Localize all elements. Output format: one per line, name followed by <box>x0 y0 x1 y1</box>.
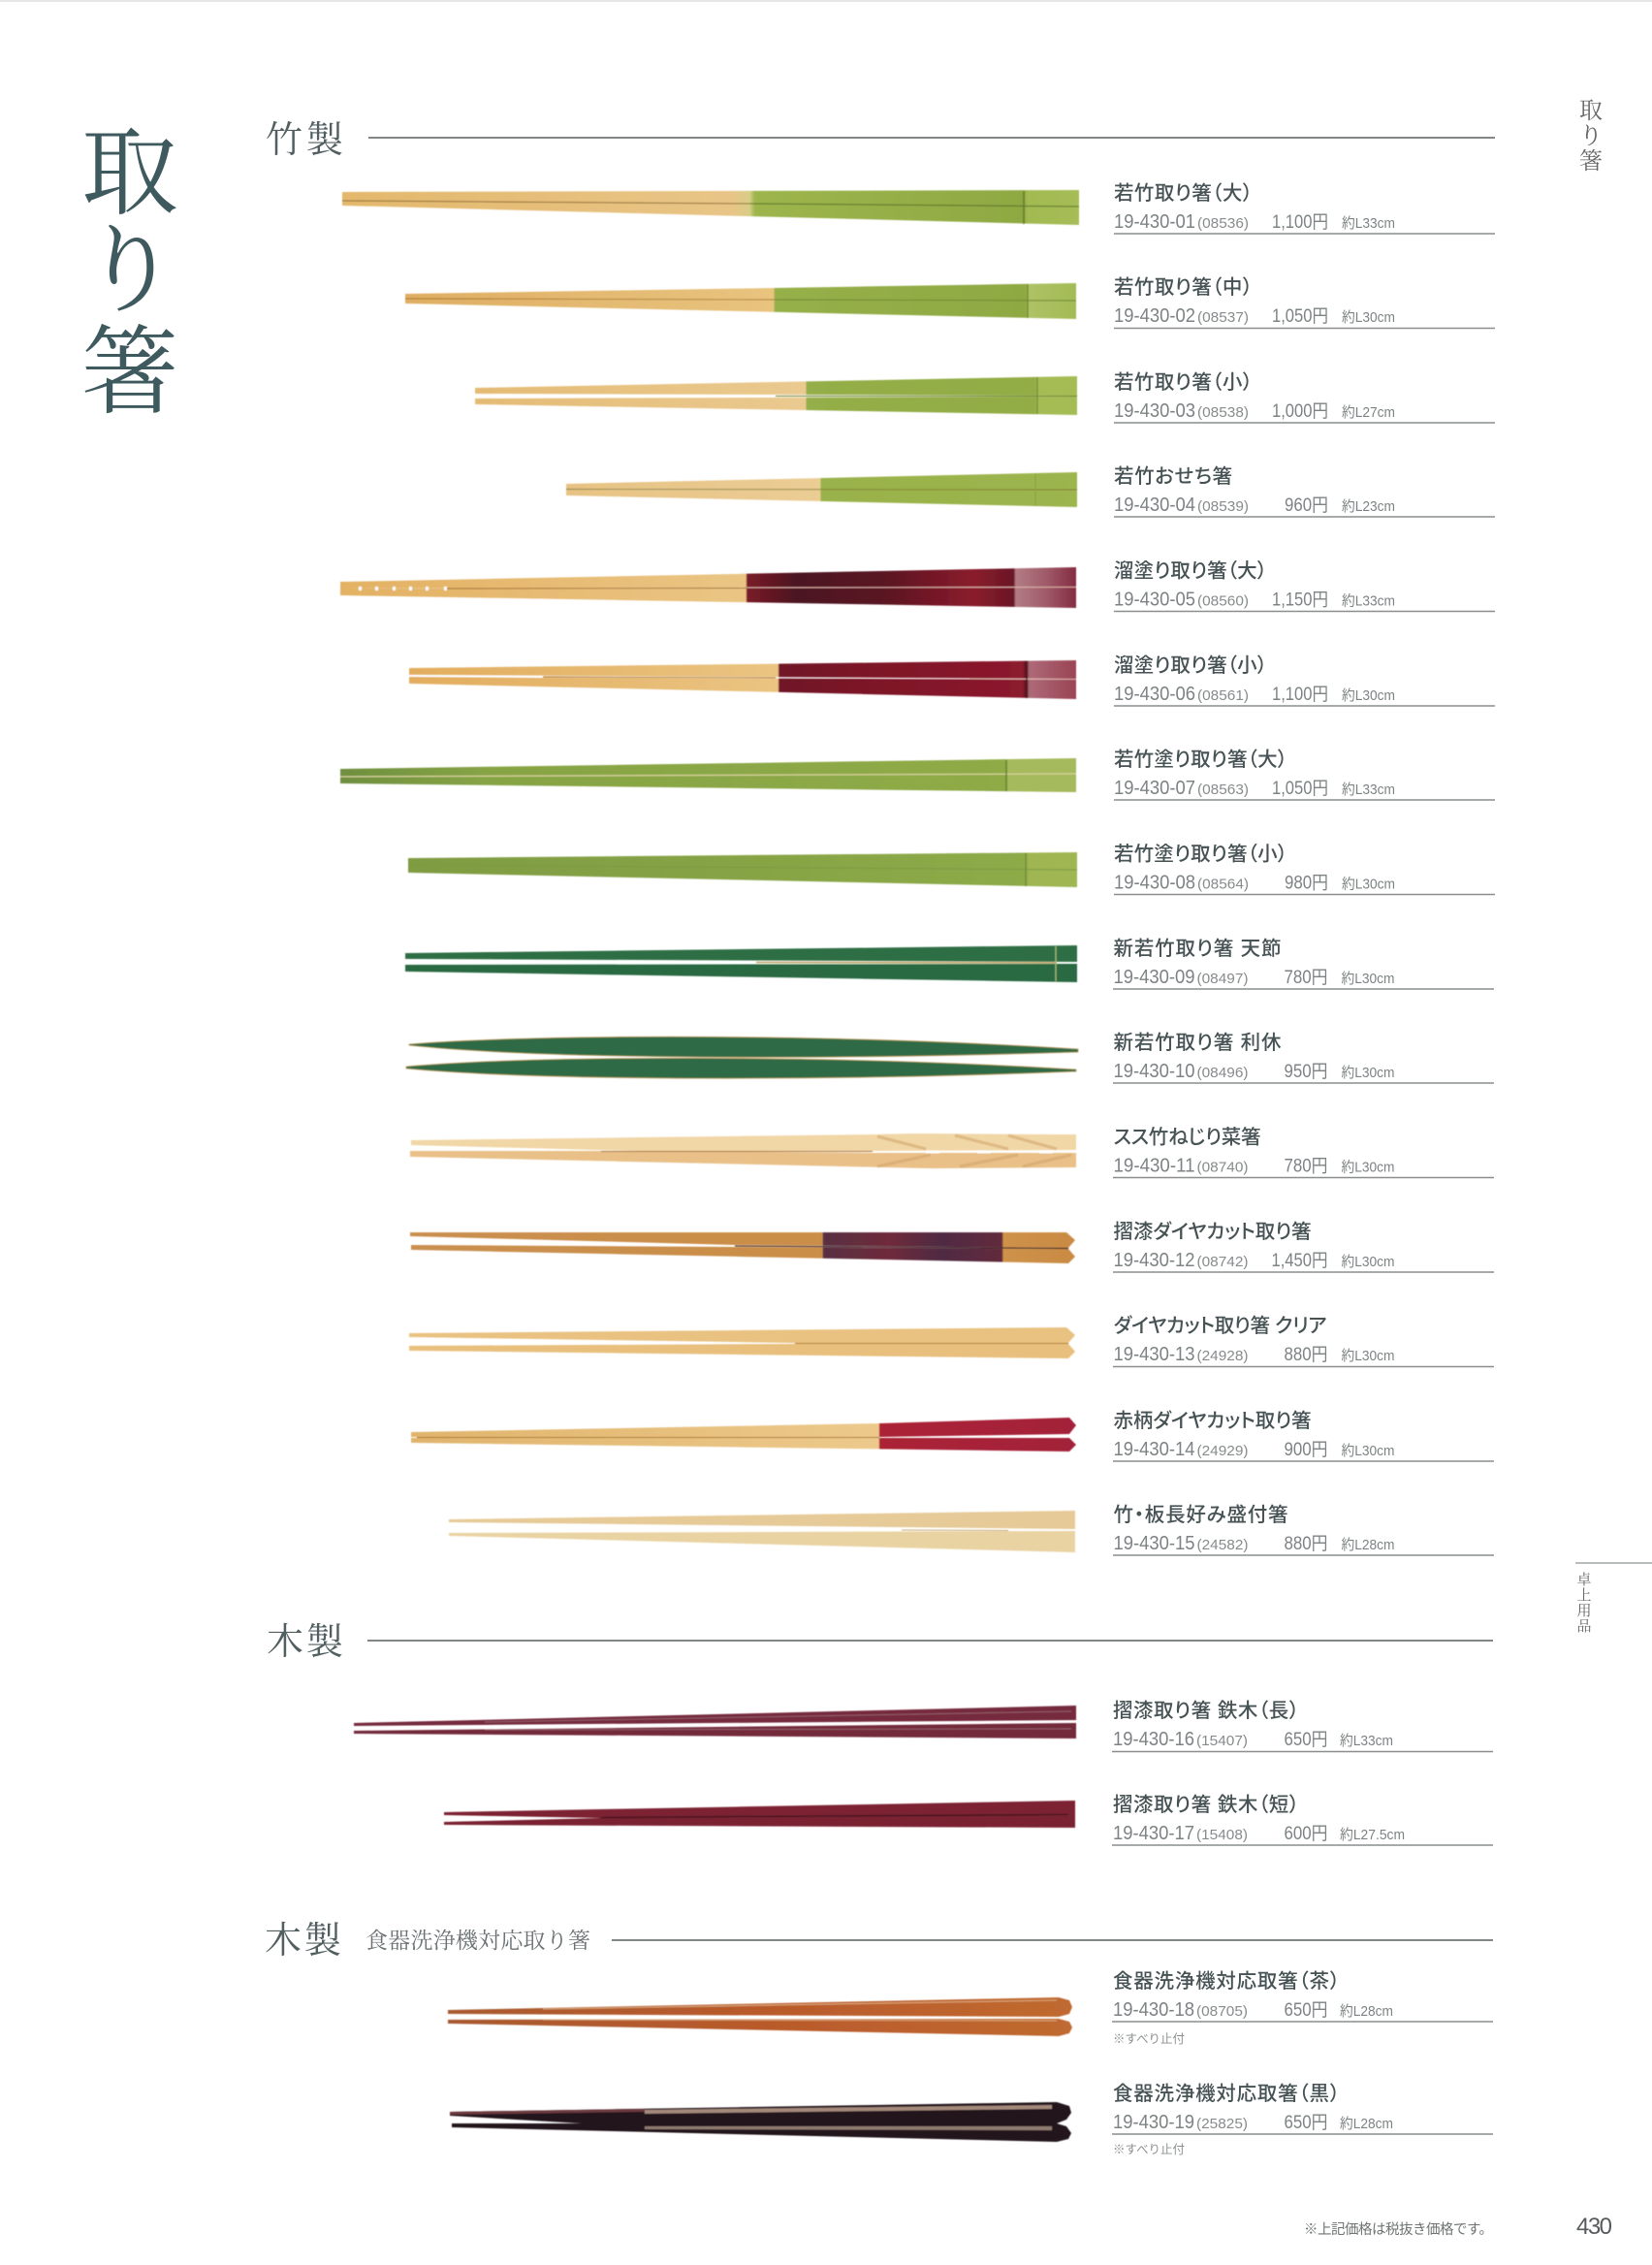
title: 取り箸 <box>81 120 178 427</box>
product 07: 約L33cm <box>1342 782 1395 798</box>
product 04: 若竹おせち箸 <box>1114 465 1232 488</box>
product 11 <box>1113 1127 1494 1177</box>
product 13 <box>1113 1315 1494 1367</box>
product 04: 960円 <box>1285 495 1328 516</box>
product 14: 900円 <box>1284 1440 1328 1460</box>
product 05: 19-430-05 <box>1114 590 1195 611</box>
chopsticks 19 <box>450 2102 1071 2142</box>
product 13: 880円 <box>1284 1345 1328 1365</box>
product 01: 若竹取り箸（大） <box>1114 182 1253 205</box>
product 17: 摺漆取り箸 鉄木（短） <box>1113 1793 1299 1816</box>
title: 取り箸: り <box>81 217 178 325</box>
product 03 <box>1114 371 1495 423</box>
product 12: 19-430-12 <box>1113 1250 1194 1271</box>
product 13: 約L30cm <box>1342 1348 1394 1364</box>
chopsticks 15 <box>449 1511 1075 1552</box>
product 13: (24928) <box>1196 1348 1249 1364</box>
product 04: 約L23cm <box>1342 498 1395 515</box>
product 18: 19-430-18 <box>1113 1999 1194 2021</box>
chopsticks 04 <box>566 472 1077 507</box>
product 18 <box>1112 1970 1493 2046</box>
product 04: 19-430-04 <box>1114 494 1195 516</box>
product 11: 19-430-11 <box>1113 1156 1194 1177</box>
product 09: 新若竹取り箸 天節 <box>1113 938 1282 960</box>
product 01: 19-430-01 <box>1114 211 1195 233</box>
chopsticks 03 <box>475 376 1077 415</box>
product 04: (08539) <box>1197 498 1249 515</box>
product 14: 19-430-14 <box>1113 1439 1194 1460</box>
product 10: 新若竹取り箸 利休 <box>1113 1032 1282 1054</box>
product 07 <box>1114 749 1495 800</box>
side tab: 卓上用品: 品 <box>1576 1618 1592 1635</box>
product 18: 約L28cm <box>1340 2003 1393 2020</box>
product 02: 約L30cm <box>1342 309 1395 326</box>
product 05: 1,150円 <box>1272 590 1328 611</box>
chopsticks 16 <box>354 1706 1076 1739</box>
chopsticks 18 <box>448 1997 1072 2036</box>
product 18: 食器洗浄機対応取箸（茶） <box>1113 1970 1340 1993</box>
product 19 <box>1112 2083 1493 2156</box>
side tab: 取り箸: り <box>1579 124 1603 149</box>
product 04 <box>1114 465 1495 517</box>
product 09: 19-430-09 <box>1113 967 1194 988</box>
product 19: 約L28cm <box>1340 2116 1393 2132</box>
product 12: 摺漆ダイヤカット取り箸 <box>1113 1221 1311 1243</box>
side tab: 取り箸: 箸 <box>1579 148 1603 175</box>
chopsticks 09 <box>405 945 1077 982</box>
product 03: 19-430-03 <box>1114 400 1195 422</box>
page number: 430 <box>1576 2214 1612 2240</box>
heading: 木製 食器洗浄機対応取り箸 <box>265 1921 1493 1962</box>
product 14: (24929) <box>1196 1443 1249 1459</box>
chopsticks 12 <box>410 1232 1075 1263</box>
product 01: (08536) <box>1197 215 1249 232</box>
product 05: 約L33cm <box>1342 593 1395 609</box>
product 18: 650円 <box>1284 2000 1328 2021</box>
product 02: 若竹取り箸（中） <box>1114 276 1253 299</box>
product 07: 19-430-07 <box>1114 778 1195 799</box>
product 19: 19-430-19 <box>1113 2112 1194 2133</box>
product 12: 1,450円 <box>1272 1251 1328 1271</box>
product 17: (15408) <box>1196 1827 1248 1843</box>
chopsticks 05 <box>340 567 1076 608</box>
chopsticks 11 <box>410 1133 1076 1168</box>
heading: 木製: 木製 <box>267 1622 343 1663</box>
product 03: 1,000円 <box>1272 401 1328 422</box>
product 18: (08705) <box>1196 2003 1248 2020</box>
product 15: (24582) <box>1196 1537 1249 1553</box>
product 03: 若竹取り箸（小） <box>1114 371 1253 394</box>
product 02: 19-430-02 <box>1114 305 1195 327</box>
product 17 <box>1112 1793 1493 1845</box>
product 15: 竹・板長好み盛付箸 <box>1113 1504 1287 1526</box>
product 08: 若竹塗り取り箸（小） <box>1114 844 1287 865</box>
product 09: 約L30cm <box>1342 971 1394 987</box>
product 10: (08496) <box>1196 1065 1249 1081</box>
product 08: (08564) <box>1197 877 1249 892</box>
chopsticks 07 <box>340 758 1076 792</box>
product 13: 19-430-13 <box>1113 1344 1194 1365</box>
product 09: 780円 <box>1284 968 1328 988</box>
product 10: 19-430-10 <box>1113 1061 1194 1082</box>
product 19: ※すべり止付 <box>1113 2143 1185 2156</box>
side tab: 取り箸: 取 <box>1579 99 1603 124</box>
product 05: (08560) <box>1197 593 1249 609</box>
product 10 <box>1113 1032 1494 1083</box>
product 19: 食器洗浄機対応取箸（黒） <box>1113 2083 1340 2105</box>
product 08: 19-430-08 <box>1114 873 1195 894</box>
product 05 <box>1114 560 1495 611</box>
product 14: 赤柄ダイヤカット取り箸 <box>1113 1410 1311 1432</box>
side tab: 卓上用品: 上 <box>1576 1587 1592 1604</box>
product 01 <box>1114 182 1495 234</box>
product 16 <box>1112 1699 1493 1751</box>
product 03: (08538) <box>1197 404 1249 421</box>
product 09 <box>1113 938 1494 989</box>
product 17: 600円 <box>1284 1824 1328 1844</box>
product 16: 19-430-16 <box>1113 1729 1194 1750</box>
chopsticks 08 <box>408 852 1077 887</box>
chopsticks 17 <box>444 1801 1075 1828</box>
product 06: 溜塗り取り箸（小） <box>1114 654 1267 677</box>
product 14 <box>1113 1410 1494 1461</box>
product 07: 若竹塗り取り箸（大） <box>1114 749 1287 771</box>
product 06: 約L30cm <box>1342 687 1395 704</box>
product 12: (08742) <box>1196 1254 1249 1270</box>
product 02: (08537) <box>1197 309 1249 326</box>
product 19: (25825) <box>1196 2116 1248 2132</box>
product 01: 1,100円 <box>1272 212 1328 233</box>
title: 取り箸: 取 <box>81 120 178 228</box>
product 19: 650円 <box>1284 2113 1328 2133</box>
product 11: 約L30cm <box>1342 1160 1394 1175</box>
product 06: (08561) <box>1197 687 1249 704</box>
product 06: 1,100円 <box>1272 685 1328 705</box>
product 16: (15407) <box>1196 1733 1248 1749</box>
product 08: 980円 <box>1285 873 1328 894</box>
chopsticks 06 <box>409 660 1076 699</box>
product 05: 溜塗り取り箸（大） <box>1114 560 1267 582</box>
product 16: 650円 <box>1284 1730 1328 1750</box>
chopsticks 14 <box>411 1418 1076 1452</box>
product 11: スス竹ねじり菜箸 <box>1113 1127 1260 1148</box>
product 10: 約L30cm <box>1342 1065 1394 1081</box>
product 11: (08740) <box>1196 1160 1249 1175</box>
product 10: 950円 <box>1284 1062 1328 1082</box>
product 15 <box>1113 1504 1494 1555</box>
heading: 木製 食器洗浄機対応取り箸: 食器洗浄機対応取り箸 <box>365 1929 590 1953</box>
product 15: 約L28cm <box>1342 1537 1394 1553</box>
product 12 <box>1113 1221 1494 1272</box>
product 15: 19-430-15 <box>1113 1533 1194 1554</box>
chopsticks 01 <box>342 190 1079 225</box>
product 12: 約L30cm <box>1342 1254 1394 1270</box>
product 01: 約L33cm <box>1342 215 1395 232</box>
product 06 <box>1114 654 1495 706</box>
product 13: ダイヤカット取り箸 クリア <box>1113 1315 1327 1337</box>
footnote: ※上記価格は税抜き価格です。 <box>1304 2221 1493 2238</box>
product 08: 約L30cm <box>1342 877 1395 892</box>
side tab: 卓上用品: 用 <box>1576 1603 1592 1619</box>
product 03: 約L27cm <box>1342 404 1395 421</box>
product 16: 摺漆取り箸 鉄木（長） <box>1113 1699 1299 1722</box>
product 07: (08563) <box>1197 782 1249 798</box>
title: 取り箸: 箸 <box>81 319 178 427</box>
product 02 <box>1114 276 1495 328</box>
side tab: 取り箸 <box>1579 99 1603 175</box>
product 07: 1,050円 <box>1272 779 1328 799</box>
product 15: 880円 <box>1284 1534 1328 1554</box>
product 14: 約L30cm <box>1342 1443 1394 1459</box>
side tab: 卓上用品 <box>1575 1563 1652 1635</box>
chopsticks 13 <box>409 1327 1075 1358</box>
side tab: 卓上用品: 卓 <box>1576 1571 1592 1588</box>
product 08 <box>1114 844 1495 894</box>
product 11: 780円 <box>1284 1156 1328 1177</box>
product 06: 19-430-06 <box>1114 684 1195 705</box>
product 16: 約L33cm <box>1340 1733 1393 1749</box>
product 02: 1,050円 <box>1272 306 1328 327</box>
chopsticks 02 <box>405 283 1076 319</box>
heading: 竹製: 竹製 <box>266 120 343 161</box>
chopsticks 10 <box>406 1037 1078 1078</box>
product 17: 約L27.5cm <box>1340 1827 1405 1843</box>
heading: 木製 食器洗浄機対応取り箸: 木製 <box>265 1921 341 1962</box>
product 17: 19-430-17 <box>1113 1823 1194 1844</box>
product 09: (08497) <box>1196 971 1249 987</box>
product 18: ※すべり止付 <box>1113 2032 1185 2046</box>
